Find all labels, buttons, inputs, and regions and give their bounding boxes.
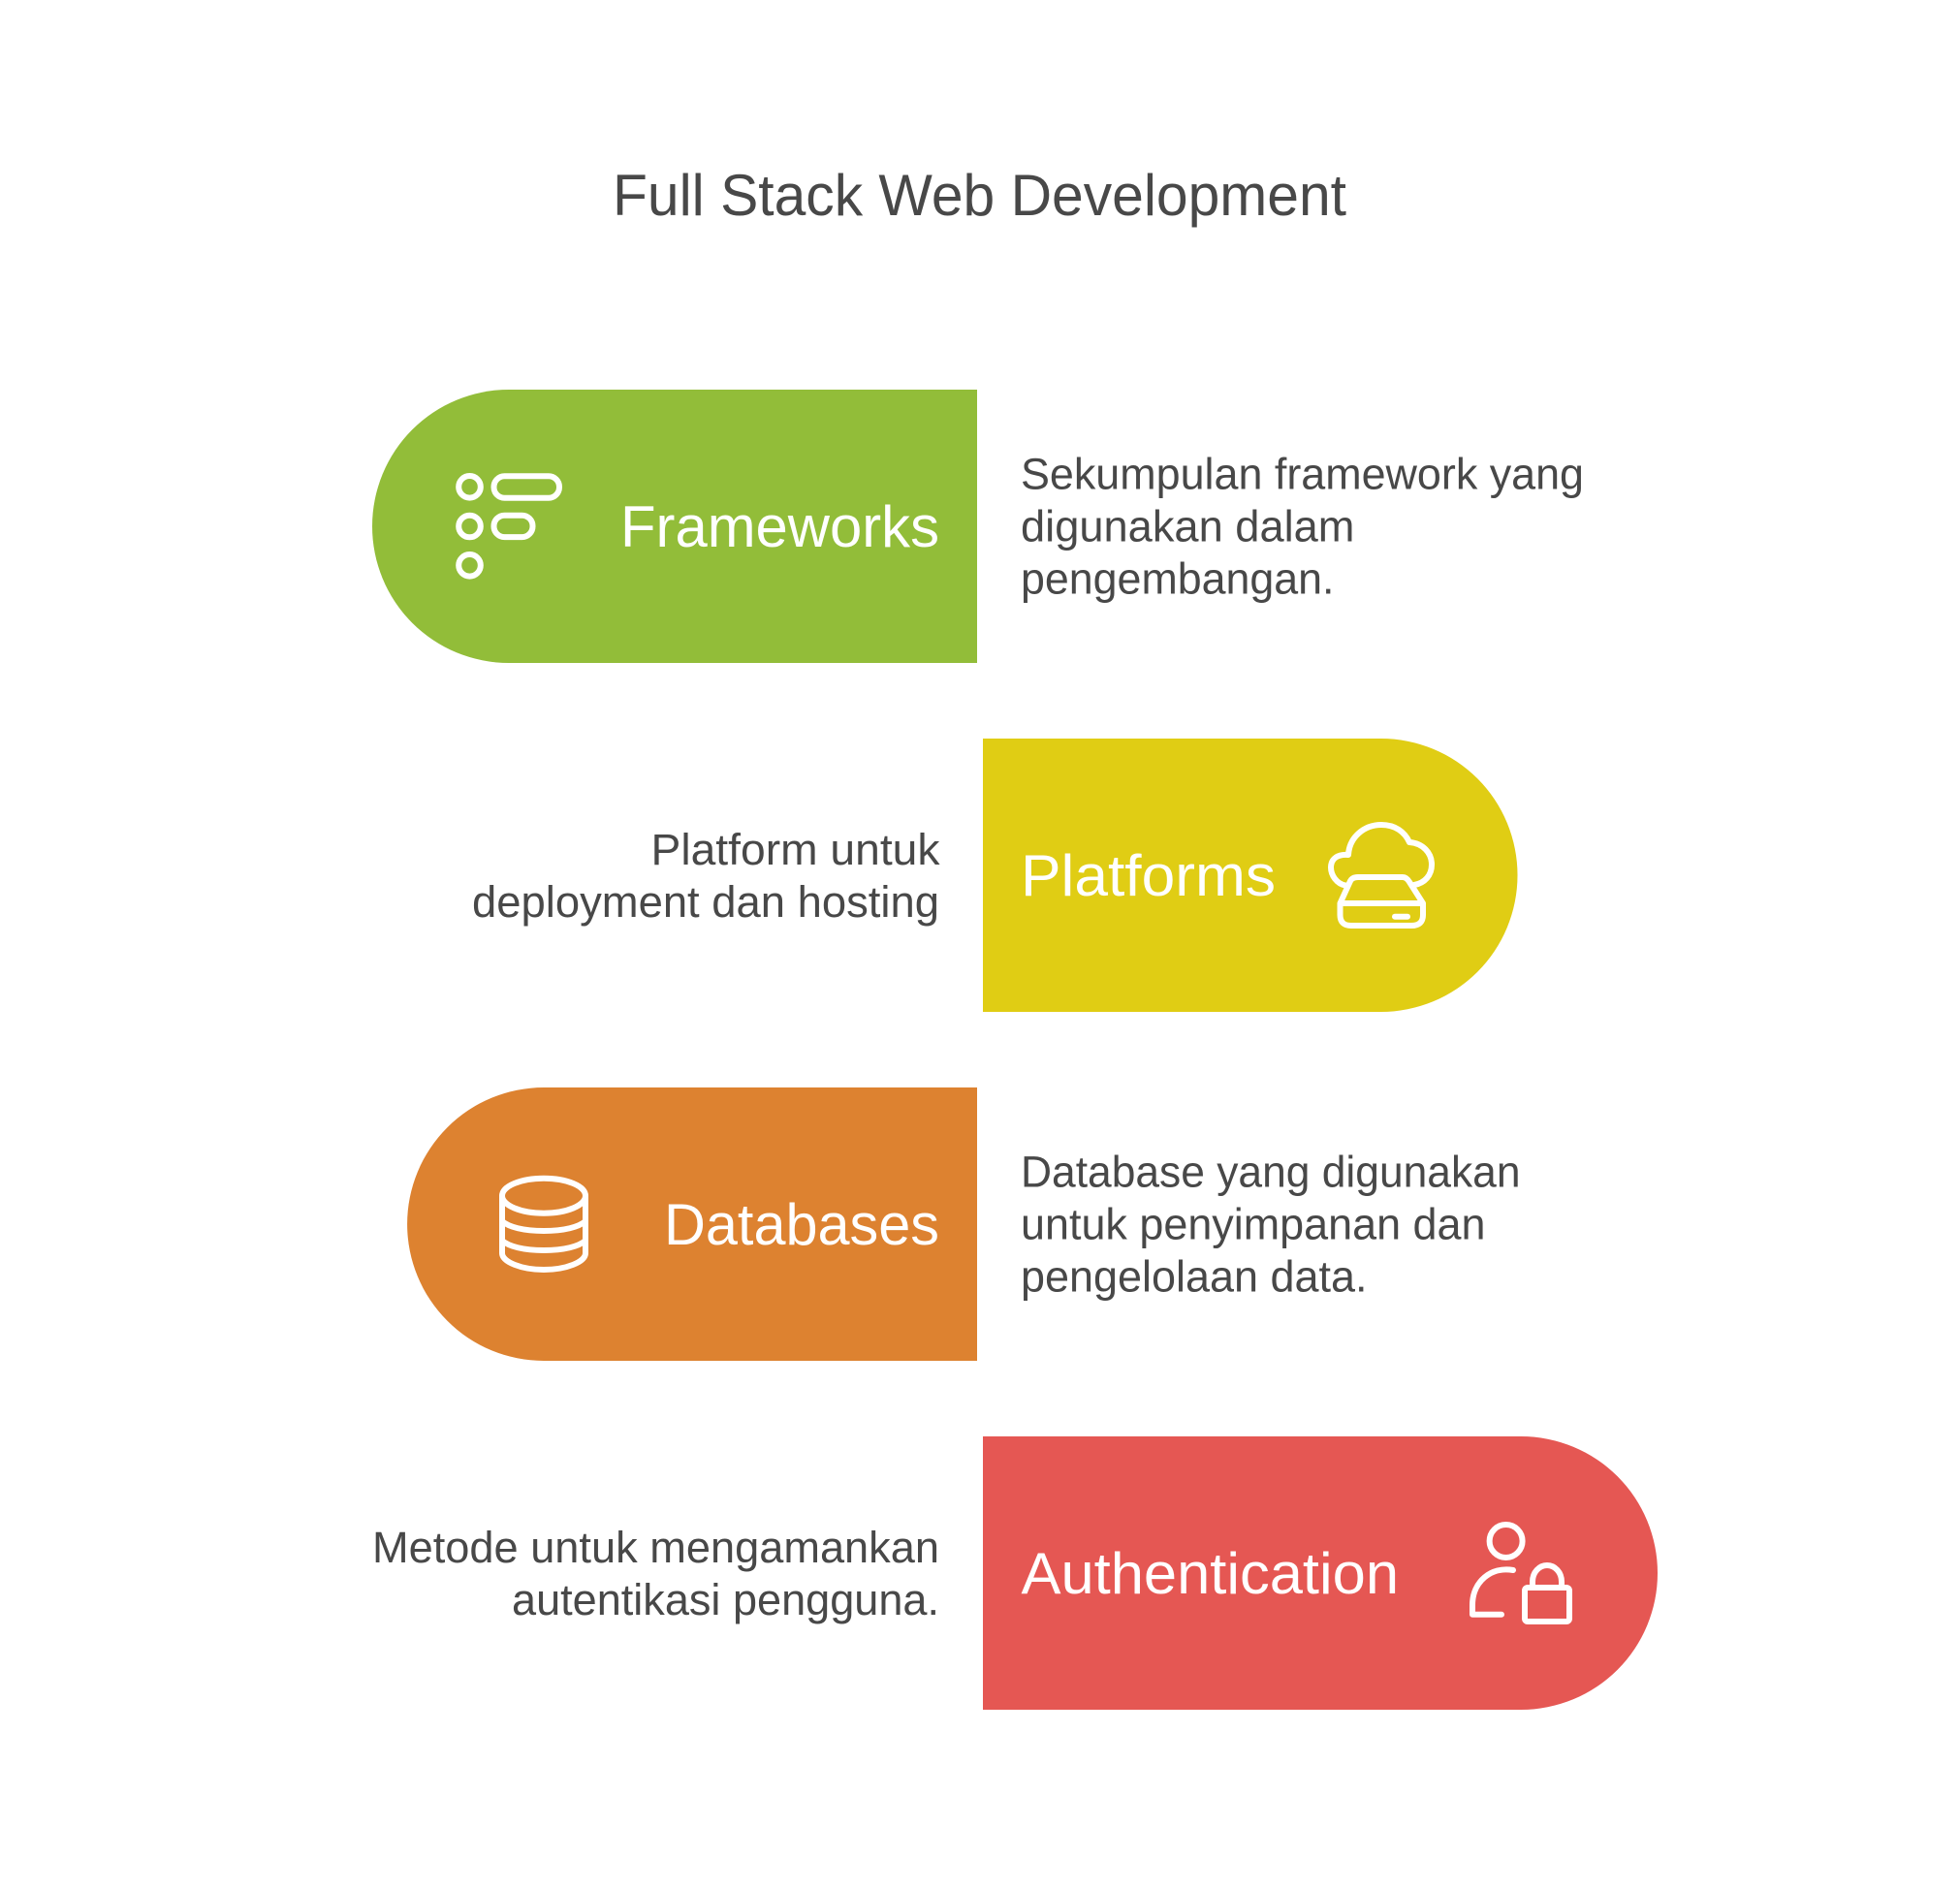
databases pill [407,1087,977,1361]
frameworks description: Sekumpulan framework yang [1021,450,1584,498]
platforms label: Platforms [1021,843,1276,908]
databases description: pengelolaan data. [1021,1252,1367,1301]
frameworks description [1021,450,1584,603]
icon: frameworks list [458,476,559,577]
authentication description: autentikasi pengguna. [512,1575,939,1624]
databases description: Database yang digunakan [1021,1148,1520,1196]
panel: databases [407,1087,977,1361]
platforms description: Platform untuk [651,825,940,874]
platforms pill [983,739,1518,1012]
databases label: Databases [664,1192,939,1257]
panel: platforms [983,739,1518,1012]
platforms description [472,825,940,927]
platforms description: deployment dan hosting [472,877,939,927]
databases description [1021,1148,1520,1301]
icon: database [502,1179,585,1270]
authentication pill [983,1436,1658,1710]
authentication label: Authentication [1022,1541,1399,1606]
panel: frameworks [372,390,977,663]
icon: cloud server [1331,825,1432,926]
databases description: untuk penyimpanan dan [1021,1200,1485,1248]
title: Full Stack Web Development [613,163,1346,228]
frameworks pill [372,390,977,663]
authentication description [372,1523,939,1624]
panel: authentication [983,1436,1658,1710]
icon: user with lock [1472,1525,1569,1622]
frameworks description: digunakan dalam [1021,502,1355,551]
authentication description: Metode untuk mengamankan [372,1523,939,1572]
frameworks label: Frameworks [620,494,939,559]
frameworks description: pengembangan. [1021,554,1334,603]
